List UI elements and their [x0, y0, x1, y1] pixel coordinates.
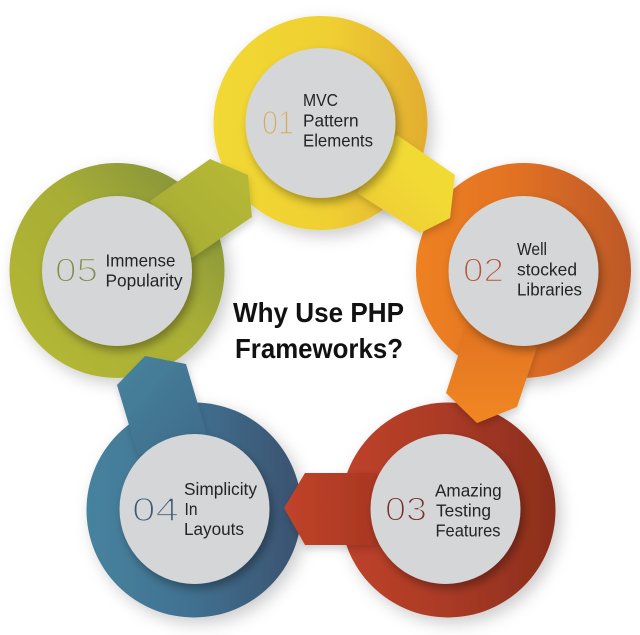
- number 05: 05: [55, 252, 98, 288]
- label: Well stocked Libraries: [517, 239, 582, 300]
- label: Immense Popularity: Popularity: [106, 271, 183, 291]
- title: Why Use PHP: [233, 297, 404, 328]
- number 02: 02: [463, 252, 504, 288]
- title: [233, 297, 404, 364]
- arrow: step 04 tab: [117, 356, 207, 455]
- inner disc: step 03: [370, 434, 520, 584]
- label: Amazing Testing Features: Features: [436, 521, 501, 541]
- panel: step 02 Well stocked Libraries: [416, 163, 631, 423]
- label: Well stocked Libraries: Well: [517, 239, 547, 259]
- label: MVC Pattern Elements: Pattern: [303, 111, 359, 131]
- label: MVC Pattern Elements: Elements: [303, 131, 373, 151]
- number 01: 01: [262, 104, 294, 141]
- ring: step 01 yellow outer circle: [214, 16, 428, 230]
- ring: step 02: [416, 163, 631, 378]
- ring: step 03: [340, 402, 556, 618]
- ring: step 04: [86, 402, 302, 618]
- label: Amazing Testing Features: Testing: [436, 501, 491, 521]
- label: Amazing Testing Features: [435, 481, 502, 541]
- label: Well stocked Libraries: Libraries: [517, 280, 582, 300]
- panel: step 01 MVC Pattern Elements: [246, 48, 455, 233]
- panel: step 03 Amazing Testing Features: [284, 402, 556, 618]
- inner disc: step 05: [42, 196, 192, 346]
- label: Simplicity In Layouts: In: [184, 499, 198, 519]
- inner disc: step 04: [120, 434, 270, 584]
- arrow: step 01 tab: [357, 135, 455, 233]
- title: Frameworks?: [235, 333, 403, 364]
- arrow: step 02 tab: [446, 325, 537, 423]
- label: Simplicity In Layouts: Simplicity: [184, 479, 257, 499]
- label: Simplicity In Layouts: [184, 479, 257, 539]
- inner disc: step 02: [448, 196, 598, 346]
- label: MVC Pattern Elements: [303, 90, 373, 151]
- label: MVC Pattern Elements: MVC: [303, 90, 338, 110]
- number 03: 03: [385, 490, 427, 528]
- panel: step 05 Immense Popularity: [10, 159, 252, 378]
- arrow: step 05 tab: [150, 159, 252, 258]
- panel: step 04 Simplicity In Layouts: [86, 356, 302, 618]
- number 04: 04: [132, 491, 179, 528]
- label: Well stocked Libraries: stocked: [517, 260, 577, 280]
- arrow: step 03 tab: [284, 473, 377, 545]
- ring: step 05: [10, 163, 224, 378]
- label: Immense Popularity: [106, 251, 183, 291]
- label: Amazing Testing Features: Amazing: [435, 481, 502, 501]
- label: Immense Popularity: Immense: [106, 251, 176, 271]
- label: Simplicity In Layouts: Layouts: [184, 519, 244, 539]
- inner disc: step 01: [246, 48, 396, 198]
